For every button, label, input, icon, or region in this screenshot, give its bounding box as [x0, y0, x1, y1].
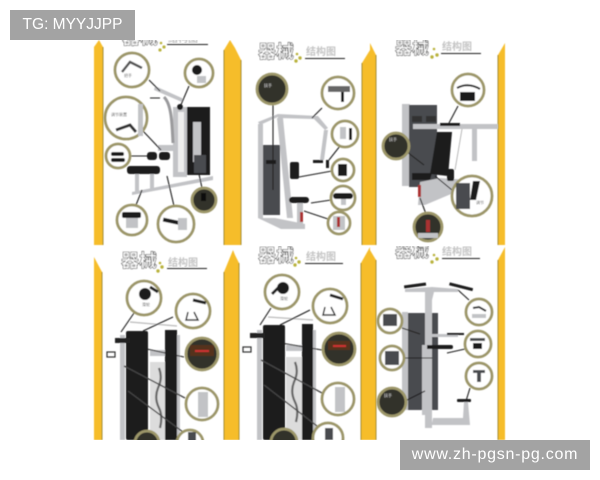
- panel 1 heading: 结构图: [168, 30, 198, 45]
- panel 5 heading: [258, 246, 344, 268]
- panel 6 heading: 器械: [395, 237, 429, 262]
- panel 4 heading: [121, 247, 207, 273]
- panel 2 heading: 结构图: [306, 43, 336, 58]
- panel 2 machine: [258, 114, 329, 229]
- panel 1: lat pulldown machine: [105, 24, 216, 242]
- watermark: top left label: [10, 10, 135, 40]
- watermark: top left label: TG: MYYJJPP: [23, 16, 122, 33]
- panel 3 heading: [394, 40, 482, 60]
- panel 4: functional trainer: [107, 247, 218, 456]
- panel 2 leader lines: [273, 104, 340, 219]
- panel 5 leader lines: [260, 308, 322, 350]
- panel 5 heading: 结构图: [306, 248, 336, 263]
- panel 2 detail circles: 扶手: [264, 82, 272, 89]
- panel 3 machine: [402, 104, 498, 205]
- panel 6 leader lines: [402, 290, 470, 401]
- watermark: bottom right url: [400, 440, 590, 470]
- panel 5 detail circles: 滑轮: [280, 295, 288, 302]
- panel 6 heading: [394, 246, 481, 264]
- panel 4 machine: [107, 322, 180, 440]
- panel 2 heading: 器械: [258, 38, 294, 64]
- panel 2 detail circles: [257, 74, 358, 234]
- panel 5: functional trainer: [243, 242, 355, 455]
- watermark: bottom right url: www.zh-pgsn-pg.com: [412, 446, 578, 463]
- panel 4 heading: 器械: [121, 247, 157, 273]
- panel 1 detail circles: 调节装置: [111, 111, 127, 118]
- panel 3 detail circles: 扶手: [389, 136, 397, 143]
- panel 1 machine: [127, 86, 213, 195]
- panel 5 heading: 器械: [258, 242, 294, 268]
- panel 3 detail circles: 调节: [476, 199, 484, 206]
- panel 6 detail circles: 扶手: [384, 392, 392, 399]
- panel 4 leader lines: [121, 313, 184, 357]
- panel 6: chin and dip assist machine: [378, 237, 492, 428]
- yellow side bands: [94, 40, 505, 440]
- panel 3: shoulder press machine: [383, 34, 498, 241]
- panel 6 machine: [402, 282, 473, 428]
- panel 5 machine: [243, 317, 316, 440]
- panel 1 leader lines: [130, 80, 202, 206]
- panel 4 heading: 结构图: [168, 254, 198, 269]
- panel 6 detail circles: [378, 299, 492, 416]
- panel 4 detail circles: [127, 281, 218, 456]
- panel 6 heading: 结构图: [442, 243, 472, 258]
- panel 4 detail circles: 滑轮: [142, 301, 150, 308]
- panel 3 heading: 器械: [395, 34, 429, 59]
- panel 3 detail circles: [383, 74, 492, 241]
- panel 1 heading: [122, 40, 209, 52]
- panel 2 heading: [258, 41, 346, 64]
- panel 1 heading: 器械: [122, 24, 158, 50]
- panel 1 detail circles: 把手: [124, 72, 132, 79]
- panel 5 detail circles: [265, 275, 355, 455]
- panel 1 detail circles: [105, 53, 216, 242]
- panel 3 heading: 结构图: [442, 38, 472, 53]
- panel 3 leader lines: [407, 106, 458, 214]
- panel 2: rear delt fly machine: [257, 38, 358, 234]
- equipment poster collage: [93, 40, 506, 440]
